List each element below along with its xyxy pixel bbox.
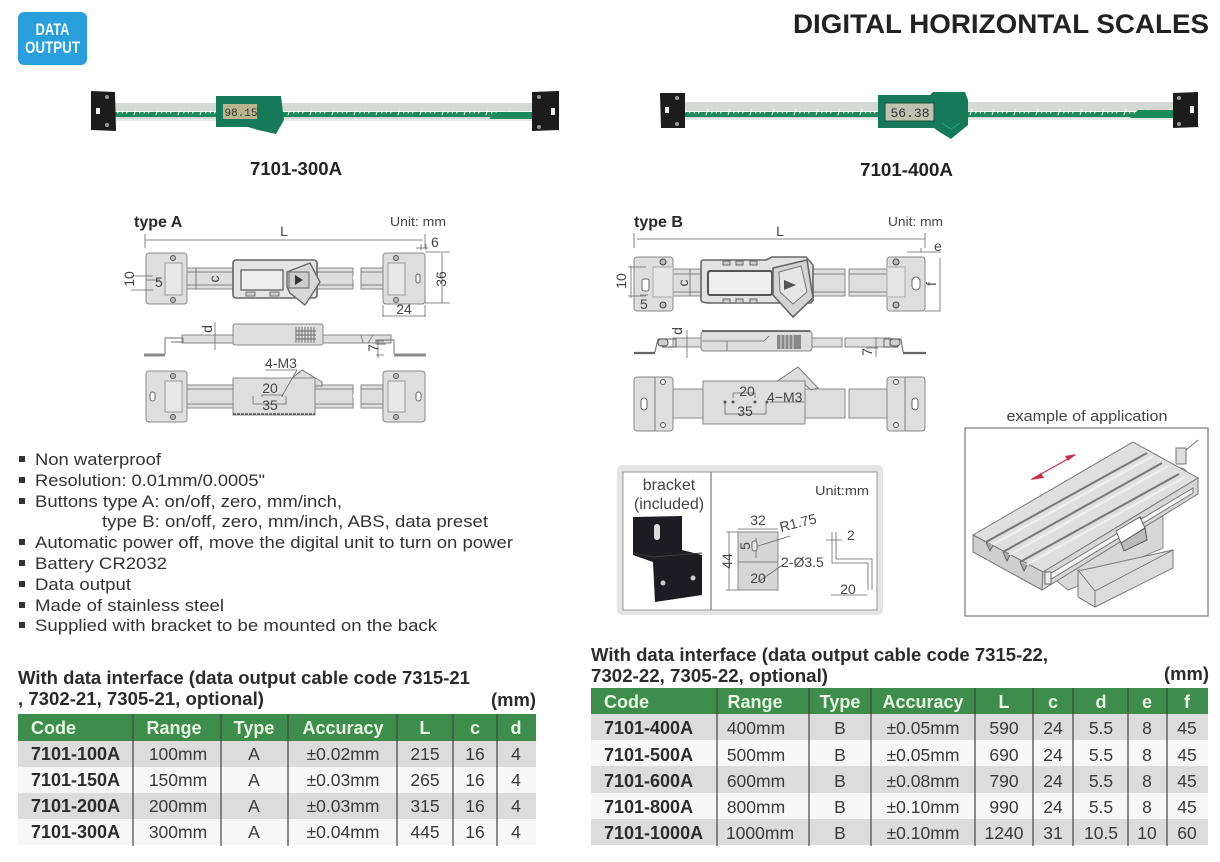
heading: right table: (mm)	[1164, 664, 1209, 684]
table: type A models: 215	[410, 744, 440, 764]
table: type A models: 16	[465, 770, 485, 790]
table: type B models: 10	[1137, 823, 1157, 843]
table: type B models: 24	[1043, 745, 1063, 765]
bracket caption: bracket	[643, 477, 696, 494]
model label 7101-300A: 7101-300A	[250, 159, 342, 179]
table: type B models: 590	[989, 718, 1019, 738]
table: type B models: 24	[1043, 718, 1063, 738]
bracket dimensions drawing: 20	[840, 581, 856, 597]
table: type B models: 790	[989, 771, 1019, 791]
table: type B models: 800mm	[727, 797, 785, 817]
table: type B models: 400mm	[727, 718, 785, 738]
product photo: 7101-300A scale	[91, 91, 559, 134]
table: type B models: 31	[1043, 823, 1063, 843]
product photo: 7101-400A scale: 56.38	[890, 106, 930, 121]
table: type A models: ±0.04mm	[307, 822, 379, 842]
bracket dimensions drawing: R1.75	[778, 510, 818, 535]
bracket photo	[633, 516, 702, 602]
table: type A models: Code	[31, 718, 76, 738]
type A side view	[144, 322, 426, 358]
table: type B models: ±0.08mm	[887, 771, 959, 791]
panel: bracket	[617, 465, 883, 615]
heading: right table	[591, 645, 1209, 686]
type A side view: d	[199, 325, 215, 333]
type A bottom view: 4-M3	[265, 355, 297, 371]
type A dimensions: 24	[396, 301, 412, 317]
feature list: Made of stainless steel	[35, 596, 224, 615]
table: type B models: B	[834, 797, 846, 817]
type A heading: type A	[134, 214, 183, 231]
feature list	[19, 450, 513, 635]
table: type B models: Code	[604, 692, 649, 712]
feature list: Supplied with bracket to be mounted on the back	[35, 616, 438, 635]
table: type B models: 600mm	[727, 771, 785, 791]
bracket dimensions drawing	[719, 510, 872, 597]
table: type B models: B	[834, 745, 846, 765]
table: type B models: 990	[989, 797, 1019, 817]
feature list: Data output	[35, 575, 131, 594]
table: type B models: 7101-1000A	[604, 823, 703, 843]
table: type A models: 100mm	[149, 744, 207, 764]
table: type A models: L	[420, 718, 430, 738]
table: type B models: 7101-600A	[604, 771, 693, 791]
table: type B models: f	[1184, 692, 1191, 712]
table: type A models: 16	[465, 796, 485, 816]
table: type B models: 7101-400A	[604, 718, 693, 738]
table: type B models: 7101-800A	[604, 797, 693, 817]
table: type B models: 690	[989, 745, 1019, 765]
table: type A models: Accuracy	[302, 718, 384, 738]
table: type B models: ±0.05mm	[887, 718, 959, 738]
table: type A models: 445	[410, 822, 440, 842]
feature list: Non waterproof	[35, 450, 161, 469]
type A dimensions: L	[280, 223, 288, 239]
type B side view: d	[669, 327, 685, 335]
badge: data output	[18, 12, 87, 65]
table: type A models: A	[248, 822, 260, 842]
feature list: Buttons type A: on/off, zero, mm/inch,	[35, 492, 342, 511]
table: type B models: 1000mm	[726, 823, 794, 843]
type B bottom view: 4−M3	[767, 389, 803, 405]
bracket dimensions drawing: 32	[750, 512, 766, 528]
bracket dimensions drawing: 2	[847, 527, 855, 543]
table: type B models: 7101-500A	[604, 745, 693, 765]
table: type B models: Range	[727, 692, 783, 712]
type B side view	[634, 327, 926, 358]
table: type B models: 8	[1142, 771, 1152, 791]
heading: left table: With data interface (data output cable code 7315-21	[18, 668, 470, 688]
table: type B models: 5.5	[1089, 797, 1113, 817]
title: DIGITAL HORIZONTAL SCALES	[793, 9, 1209, 39]
table: type A models: 200mm	[149, 796, 207, 816]
type B dimensions: 5	[640, 296, 648, 312]
table: type B models: 10.5	[1084, 823, 1118, 843]
table: type A models: 300mm	[149, 822, 207, 842]
type A bottom view	[146, 355, 425, 422]
bracket caption: (included)	[634, 496, 704, 513]
type A dimensions	[121, 223, 450, 317]
table: type B models: Type	[820, 692, 860, 712]
feature list: Resolution: 0.01mm/0.0005"	[35, 471, 265, 490]
type A dimensions: 10	[121, 271, 137, 287]
type B dimensions: L	[776, 223, 784, 239]
heading: left table: , 7302-21, 7305-21, optional)	[18, 689, 264, 709]
table: type A models: c	[470, 718, 480, 738]
type A top view	[121, 223, 450, 317]
type A side view: 7	[365, 344, 381, 352]
table: type A models: 265	[410, 770, 440, 790]
table: type B models: 8	[1142, 797, 1152, 817]
table: type A models: 7101-100A	[31, 744, 120, 764]
table: type A models: A	[248, 770, 260, 790]
bracket dimensions drawing: 44	[719, 553, 735, 569]
table: type A models: Type	[234, 718, 274, 738]
table: type B models: 45	[1177, 797, 1197, 817]
heading: right table: With data interface (data output cable code 7315-22,	[591, 645, 1048, 665]
type B heading: type B	[634, 214, 683, 231]
type B unit: Unit: mm	[888, 214, 943, 229]
type B dimensions: c	[675, 280, 691, 286]
type A bottom view: 20	[262, 380, 278, 396]
type A bottom view: 35	[262, 397, 278, 413]
table: type B models: ±0.10mm	[887, 797, 959, 817]
table: type A models: d	[510, 718, 522, 738]
feature list: Battery CR2032	[35, 554, 167, 573]
table: type A models: 315	[410, 796, 440, 816]
bracket dimensions drawing: 2-Ø3.5	[781, 554, 824, 570]
arrow: travel direction	[1030, 454, 1076, 480]
type A dimensions: 36	[433, 271, 449, 287]
table: type A models: 16	[465, 822, 485, 842]
machine table illustration	[973, 440, 1198, 607]
type B side view: 7	[859, 348, 875, 356]
bracket dimensions drawing: 20	[750, 570, 766, 586]
table: type A models: ±0.03mm	[307, 796, 379, 816]
table: type B models	[591, 688, 1208, 846]
table: type B models: 24	[1043, 797, 1063, 817]
type B top view	[613, 223, 942, 317]
table: type B models: 45	[1177, 771, 1197, 791]
table: type A models: A	[248, 796, 260, 816]
table: type A models: 4	[511, 796, 521, 816]
heading: left table	[18, 668, 536, 710]
product photo: 7101-300A scale: 98.15	[224, 108, 258, 120]
type B dimensions: e	[934, 238, 942, 254]
table: type B models: ±0.05mm	[887, 745, 959, 765]
type B dimensions: f	[923, 282, 939, 286]
panel: example of application	[965, 428, 1208, 616]
table: type B models: 500mm	[727, 745, 785, 765]
table: type B models: B	[834, 823, 846, 843]
type A dimensions: c	[206, 276, 222, 282]
table: type B models: 5.5	[1089, 718, 1113, 738]
drawing: type A	[121, 214, 450, 422]
table: type A models: A	[248, 744, 260, 764]
model label 7101-400A: 7101-400A	[860, 160, 953, 180]
table: type A models: 4	[511, 770, 521, 790]
heading: right table: 7302-22, 7305-22, optional)	[591, 666, 828, 686]
table: type A models: 4	[511, 744, 521, 764]
table: type B models: Accuracy	[882, 692, 964, 712]
table: type B models: ±0.10mm	[887, 823, 959, 843]
table: type A models: ±0.03mm	[307, 770, 379, 790]
table: type B models: 1240	[985, 823, 1024, 843]
type A unit: Unit: mm	[390, 214, 446, 229]
table: type A models: 7101-300A	[31, 822, 120, 842]
table: type A models: Range	[146, 718, 202, 738]
heading: left table: (mm)	[491, 690, 536, 710]
table: type A models: 7101-150A	[31, 770, 120, 790]
table: type A models: 7101-200A	[31, 796, 120, 816]
type B dimensions	[613, 223, 942, 312]
table: type B models: 8	[1142, 745, 1152, 765]
example of application caption: example of application	[1006, 409, 1168, 425]
table: type B models: c	[1048, 692, 1058, 712]
bracket dimensions drawing: 5	[737, 542, 753, 550]
badge: data output: OUTPUT	[25, 38, 80, 57]
table: type B models: 45	[1177, 718, 1197, 738]
type A dimensions: 6	[431, 234, 439, 250]
feature list: type B: on/off, zero, mm/inch, ABS, data preset	[102, 512, 488, 531]
type B bottom view	[634, 367, 925, 431]
table: type A models: 150mm	[149, 770, 207, 790]
table: type B models: L	[998, 692, 1010, 712]
table: type A models: ±0.02mm	[307, 744, 379, 764]
table: type B models: B	[834, 718, 846, 738]
table: type B models: 60	[1177, 823, 1197, 843]
table: type B models: B	[834, 771, 846, 791]
table: type A models: 16	[465, 744, 485, 764]
type B bottom view: 20	[739, 383, 755, 399]
type B dimensions: 10	[613, 273, 629, 289]
table: type B models: 5.5	[1089, 745, 1113, 765]
type B bottom view: 35	[737, 403, 753, 419]
table: type B models: 5.5	[1089, 771, 1113, 791]
product photo: 7101-400A scale	[660, 92, 1198, 139]
bracket unit: Unit:mm	[815, 483, 869, 498]
badge: data output: DATA	[36, 20, 70, 39]
table: type B models: e	[1142, 692, 1152, 712]
table: type A models	[18, 714, 536, 846]
table: type B models: d	[1096, 692, 1106, 712]
table: type B models: 24	[1043, 771, 1063, 791]
type A dimensions: 5	[155, 274, 163, 290]
feature list: Automatic power off, move the digital unit to turn on power	[35, 533, 513, 552]
table: type B models: 8	[1142, 718, 1152, 738]
drawing: type B	[613, 214, 943, 431]
table: type A models: 4	[511, 822, 521, 842]
bracket caption	[634, 477, 704, 513]
table: type B models: 45	[1177, 745, 1197, 765]
